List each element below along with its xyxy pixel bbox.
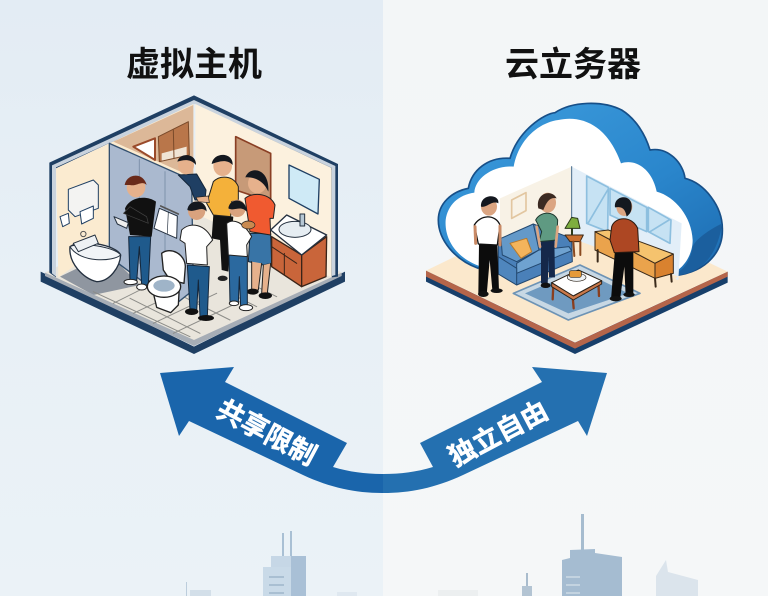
room walls and floor — [478, 167, 682, 342]
platform — [426, 198, 728, 354]
door — [236, 137, 271, 202]
console cabinet — [595, 230, 673, 287]
sofa — [498, 224, 572, 285]
roof frame and walls — [49, 95, 338, 277]
skyline: left city — [186, 531, 357, 596]
mirror — [289, 165, 319, 214]
person in yellow shirt — [196, 155, 238, 281]
person in white shirt, front left — [180, 201, 214, 321]
man with crossed arms — [123, 176, 156, 290]
person in white shirt — [474, 196, 503, 297]
person in red shirt — [245, 170, 275, 299]
vanity cabinet and sink — [271, 214, 327, 287]
left toilet — [70, 231, 121, 282]
skyline: right city — [438, 514, 698, 596]
double-headed curved arrow — [160, 367, 607, 493]
rug — [513, 265, 640, 320]
background: left panel — [0, 0, 383, 596]
title: cloud server: 云立务器 — [505, 46, 641, 84]
base platform — [41, 200, 345, 354]
wall picture — [512, 193, 526, 218]
person in white shirt, front right — [227, 200, 255, 311]
towel rail and towels — [114, 206, 178, 238]
arrow right half — [383, 367, 607, 493]
man in rust sweater — [610, 197, 639, 301]
illustration: cloud room — [426, 103, 728, 354]
woman in green top — [536, 193, 558, 288]
title: virtual host: 虚拟主机 — [126, 46, 262, 84]
arrow left half — [160, 367, 383, 493]
side table and lamp — [565, 217, 583, 256]
illustration: crowded bathroom — [41, 95, 345, 354]
center toilet — [147, 251, 185, 313]
coffee table — [552, 270, 602, 308]
background: right panel — [383, 0, 768, 596]
person behind: navy shirt — [177, 155, 206, 200]
arrow label: independent freedom: 独立自由 — [444, 395, 553, 472]
wall dispenser — [60, 180, 98, 227]
windows — [587, 176, 671, 243]
partition wall — [109, 143, 193, 303]
arrow label: shared limits: 共享限制 — [212, 394, 321, 471]
cloud — [438, 103, 722, 287]
